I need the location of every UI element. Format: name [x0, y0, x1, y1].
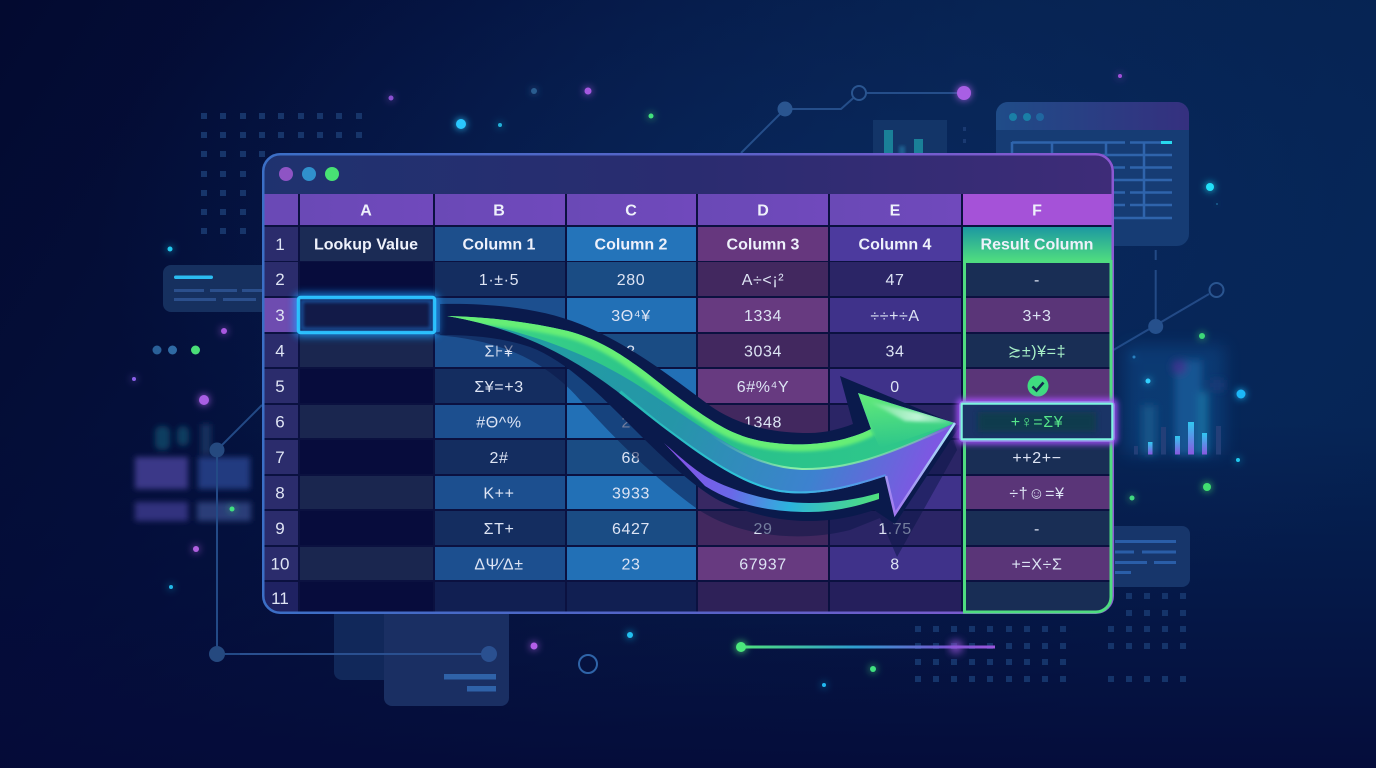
row 1: column titles: Column 1 — [463, 236, 536, 254]
row 8: 3933 — [612, 486, 650, 502]
row 2: 1·±·5 — [479, 272, 519, 289]
row 10: 67937 — [739, 556, 787, 574]
row 7: 7 — [275, 448, 285, 467]
row 8: ÷†☺=¥ — [1009, 486, 1065, 502]
row 10: ΔΨ⁄Δ± — [474, 556, 524, 574]
row 4 — [262, 334, 1114, 367]
row 1: column titles: Lookup Value — [314, 236, 418, 254]
row 8: K++ — [483, 486, 515, 502]
icon: check mark — [1028, 376, 1048, 396]
row 5: Σ¥=+3 — [474, 379, 524, 396]
row 5: 6#%⁴Y — [737, 379, 789, 396]
row 1: column titles — [262, 227, 1114, 261]
connector: top nodes — [741, 86, 971, 153]
row 2: 280 — [617, 272, 645, 289]
row 11 — [262, 582, 1114, 614]
panel: notes card, left — [163, 265, 273, 312]
row 5: 5 — [275, 377, 285, 396]
progress line, bottom — [736, 640, 995, 654]
selected cell: result F6: +♀=Σ¥ — [1011, 414, 1063, 431]
ring node, bottom — [579, 655, 597, 673]
row 3: 3+3 — [1023, 308, 1051, 325]
column header row: B — [493, 202, 505, 220]
row 5 — [262, 369, 1114, 403]
column header row: A — [360, 202, 372, 220]
row 10: +=X÷Σ — [1011, 556, 1063, 574]
row 7: 2# — [490, 450, 508, 467]
row 9 — [262, 511, 1114, 545]
row 10: 10 — [271, 554, 289, 574]
row 3: 3 — [275, 306, 285, 325]
row 6: 23 — [622, 414, 640, 432]
row 9: 6427 — [612, 521, 650, 538]
row 2: 47 — [886, 272, 904, 289]
row 11: 11 — [271, 589, 289, 608]
row 10 — [262, 547, 1114, 580]
row 7 — [262, 440, 1114, 474]
arrow dark outline — [440, 304, 960, 524]
row 1: column titles: Column 4 — [859, 236, 932, 254]
arrow lower ribbon — [664, 443, 879, 512]
row 8 — [262, 476, 1114, 509]
row 9: 1.75 — [878, 521, 912, 538]
bar chart: blurred right — [1125, 345, 1225, 455]
row 9: ΣT+ — [484, 521, 514, 538]
row 1: column titles: 1 — [275, 235, 285, 254]
row 3: 3Θ⁴¥ — [611, 308, 651, 325]
row 2: A÷<¡² — [742, 272, 784, 289]
row 3: 1334 — [744, 308, 782, 325]
row 7: 68 — [622, 450, 640, 467]
row 4: 3 — [626, 344, 636, 360]
row 4: ≿±)¥=‡ — [1008, 344, 1066, 360]
row 9: 9 — [275, 519, 285, 538]
row 5: 0 — [890, 379, 900, 396]
column header row — [262, 194, 1114, 225]
row 2 — [262, 262, 1114, 296]
connector: right nodes — [1110, 250, 1224, 352]
row 9: 29 — [754, 521, 772, 538]
row 4: 34 — [886, 344, 904, 360]
blurred panel, left — [135, 424, 251, 521]
arrow main body — [447, 316, 955, 514]
row 10: 23 — [622, 556, 640, 574]
row 1: column titles: Column 2 — [595, 236, 668, 254]
column header row: F — [1032, 202, 1042, 220]
arrowhead edge highlights — [886, 423, 955, 514]
status dots, left — [152, 346, 200, 354]
row 10: 8 — [890, 556, 900, 574]
panel: stacked cards, bottom — [240, 600, 509, 706]
glowing particles — [132, 74, 1246, 687]
row 7: ++2+− — [1012, 450, 1062, 467]
selected cell: result F6 — [960, 402, 1114, 441]
connector: left and bottom nodes — [209, 405, 489, 662]
row 6: 1348 — [744, 414, 782, 432]
arrow shadow — [436, 320, 957, 557]
row 6: #Θ^% — [476, 414, 522, 432]
dot grid: bottom right — [915, 593, 1186, 682]
panel: small bar chart, top centre — [873, 120, 947, 156]
row 9: - — [1034, 521, 1040, 538]
arrow: lookup path from A3 to F6 — [440, 304, 960, 524]
row 6: 6 — [275, 412, 285, 432]
row 8: 8 — [275, 484, 285, 502]
column header row: E — [890, 202, 901, 220]
row 4: 3034 — [744, 344, 782, 360]
row 4: Σ⊦¥ — [485, 344, 513, 360]
result column outline — [964, 262, 1111, 612]
panel: mini spreadsheet window, top right — [996, 102, 1189, 246]
column header row: D — [757, 202, 769, 220]
title bar — [262, 153, 1114, 194]
panel: text card, bottom right — [1100, 526, 1190, 587]
row 3 — [262, 298, 1114, 332]
row 2: 2 — [275, 270, 285, 289]
column header row: C — [625, 202, 637, 220]
row 3: ÷÷+÷A — [870, 308, 920, 325]
arrow upper green band — [447, 316, 955, 493]
row 4: 4 — [275, 342, 285, 360]
row 1: column titles: Column 3 — [727, 236, 800, 254]
panel: main spreadsheet window — [262, 153, 1114, 614]
row 1: column titles: Result Column — [981, 236, 1093, 254]
row 6 — [264, 405, 959, 438]
selected cell: lookup value A3 — [298, 298, 434, 332]
dot grid: top left — [201, 113, 362, 234]
row 2: - — [1034, 272, 1040, 289]
